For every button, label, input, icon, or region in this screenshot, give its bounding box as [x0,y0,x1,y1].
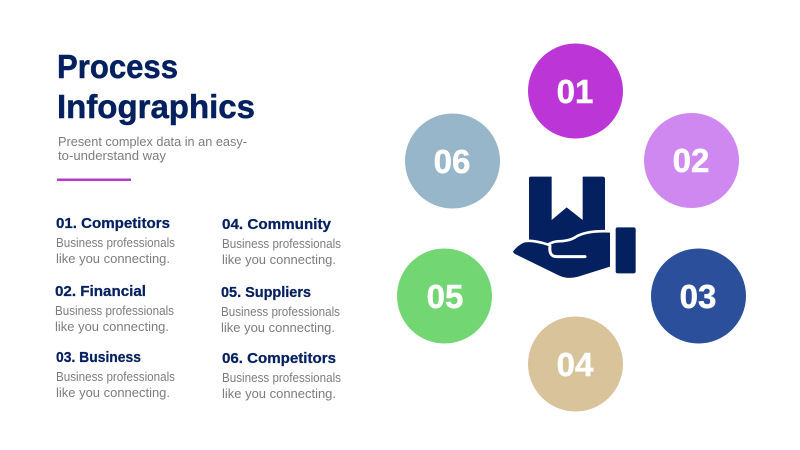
list item 02 [55,283,174,334]
list item 04: like you connecting. [222,253,336,267]
list item 06 [222,350,341,401]
subtitle: to-understand way [58,149,167,163]
list item 04 [222,216,341,267]
list item 01: like you connecting. [56,252,170,266]
step circle 02: 02 [673,142,709,179]
step circle 02 [644,113,739,208]
step circle 01 [528,44,623,138]
list item 01: 01. Competitors [56,215,170,232]
list item 05 [221,284,340,335]
subtitle [58,135,247,163]
list item 06: like you connecting. [222,387,336,401]
list item 02: Business professionals [55,304,174,318]
list item 03: 03. Business [56,349,141,366]
step circle 01: 01 [557,73,593,110]
accent divider [57,178,131,181]
list item 01: Business professionals [56,236,175,250]
list item 06: Business professionals [222,371,341,385]
icon: hand [513,233,610,278]
step circle 03: 03 [680,278,716,315]
list item 05: 05. Suppliers [221,284,311,301]
list item 03 [56,349,175,400]
step circle 05 [397,248,492,344]
step circle 03 [651,248,746,344]
step circle 05: 05 [427,278,463,315]
list item 06: 06. Competitors [222,350,336,367]
list item 05: Business professionals [221,305,340,319]
list item 04: Business professionals [222,237,341,251]
icon: finger gap [550,246,585,257]
title: Process [57,48,178,85]
step circle 06 [405,114,500,208]
title [57,48,255,125]
list item 02: 02. Financial [55,283,146,300]
list item 02: like you connecting. [55,320,169,334]
icon: box [529,177,605,245]
icon: cuff [616,227,636,273]
icon: hand holding box [513,177,636,278]
step circle 04 [528,316,623,412]
subtitle: Present complex data in an easy- [58,135,247,149]
list item 03: like you connecting. [56,386,170,400]
list item 05: like you connecting. [221,321,335,335]
list item 04: 04. Community [222,216,332,233]
step circle 06: 06 [434,143,470,180]
step circle 04: 04 [557,346,594,383]
list item 01 [56,215,175,266]
list item 03: Business professionals [56,370,175,384]
title: Infographics [57,88,255,125]
